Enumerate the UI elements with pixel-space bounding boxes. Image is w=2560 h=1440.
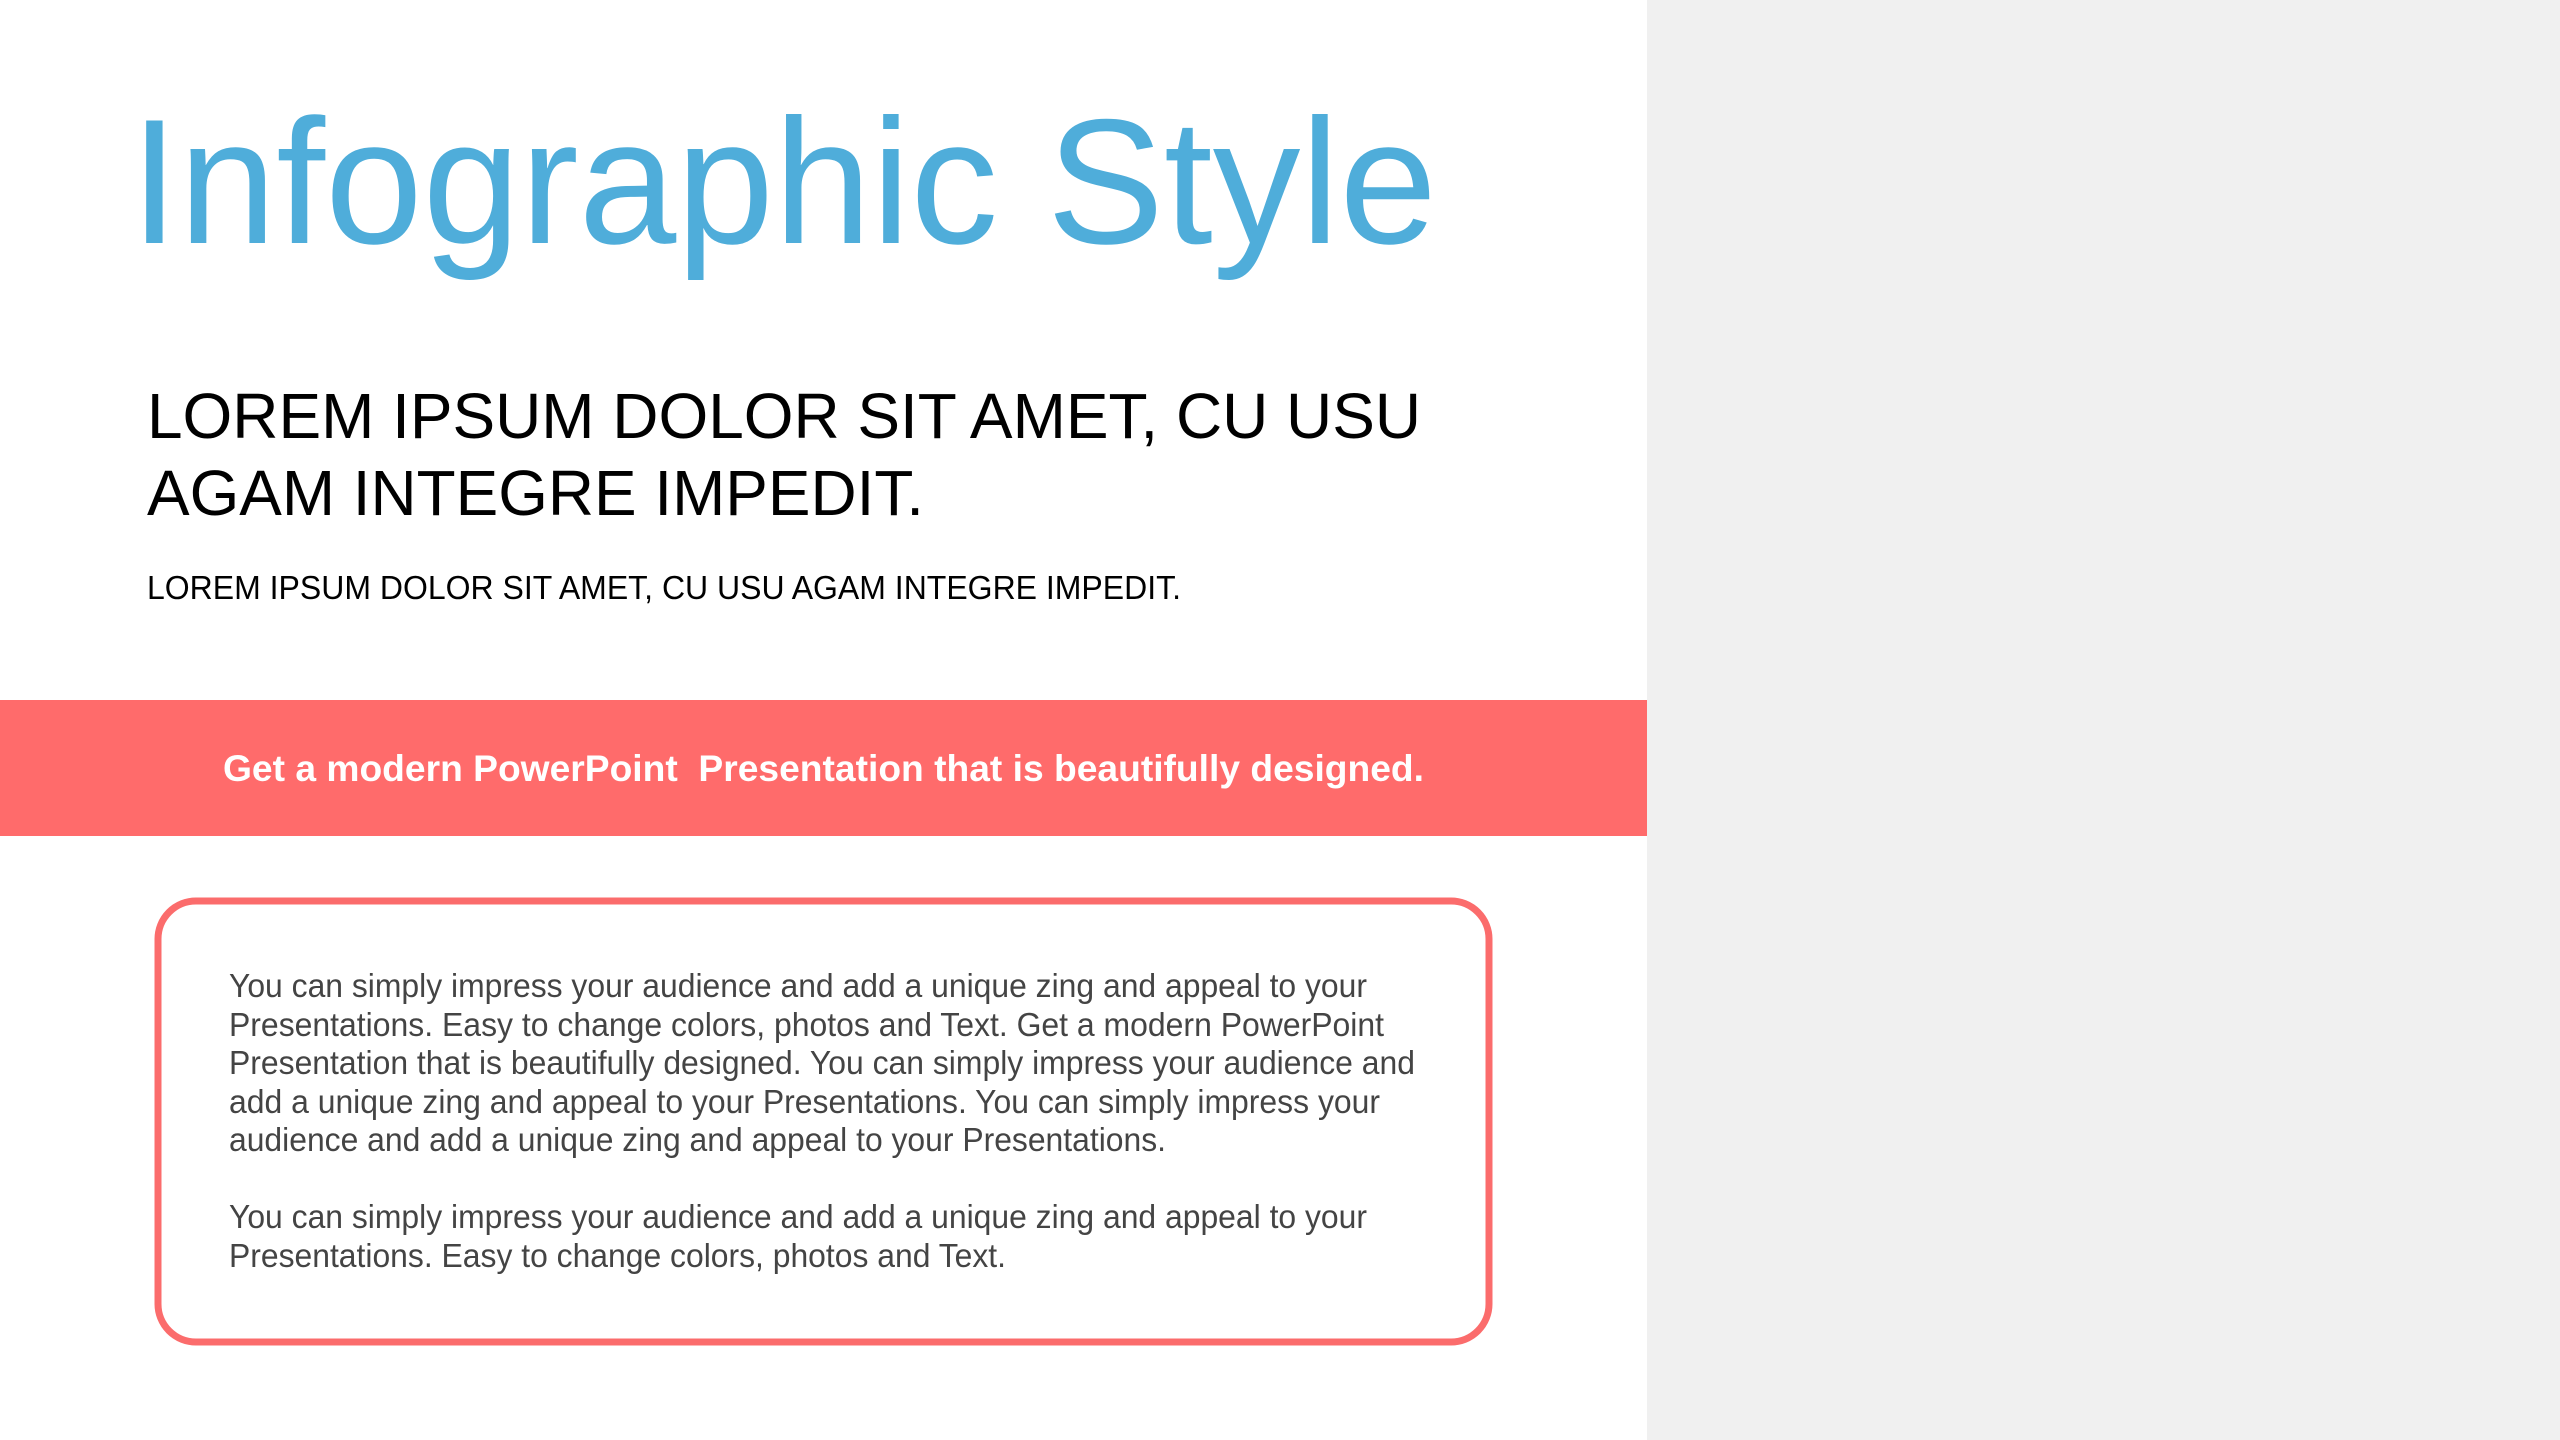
subheading: LOREM IPSUM DOLOR SIT AMET, CU USU AGAM INTEGRE IMPEDIT.: [147, 569, 1181, 606]
text block: first paragraph: You can simply impress your audience and add a unique zing and appeal to your: [229, 967, 1367, 1004]
heading: two-line lorem ipsum: [147, 380, 1421, 529]
text block: first paragraph: add a unique zing and appeal to your Presentations. You can simply impress your: [229, 1083, 1380, 1120]
heading: two-line lorem ipsum: AGAM INTEGRE IMPEDIT.: [147, 457, 924, 529]
text block: first paragraph: Presentations. Easy to change colors, photos and Text. Get a modern PowerPoint: [229, 1006, 1384, 1043]
banner: Get a modern PowerPoint Presentation that is beautifully designed.: [223, 748, 1424, 789]
title: Infographic Style: [130, 82, 1437, 281]
panel: right grey side panel: [1647, 0, 2560, 1440]
text block: second paragraph: [229, 1198, 1367, 1274]
text block: first paragraph: Presentation that is beautifully designed. You can simply impress your audience and: [229, 1044, 1415, 1081]
text block: second paragraph: You can simply impress your audience and add a unique zing and appeal to your: [229, 1198, 1367, 1235]
banner: [0, 700, 1647, 836]
text block: first paragraph: audience and add a unique zing and appeal to your Presentations.: [229, 1121, 1166, 1158]
heading: two-line lorem ipsum: LOREM IPSUM DOLOR SIT AMET, CU USU: [147, 380, 1421, 452]
panel: outlined rounded text box: [158, 901, 1489, 1342]
text block: first paragraph: [229, 967, 1415, 1158]
text block: second paragraph: Presentations. Easy to change colors, photos and Text.: [229, 1237, 1006, 1274]
